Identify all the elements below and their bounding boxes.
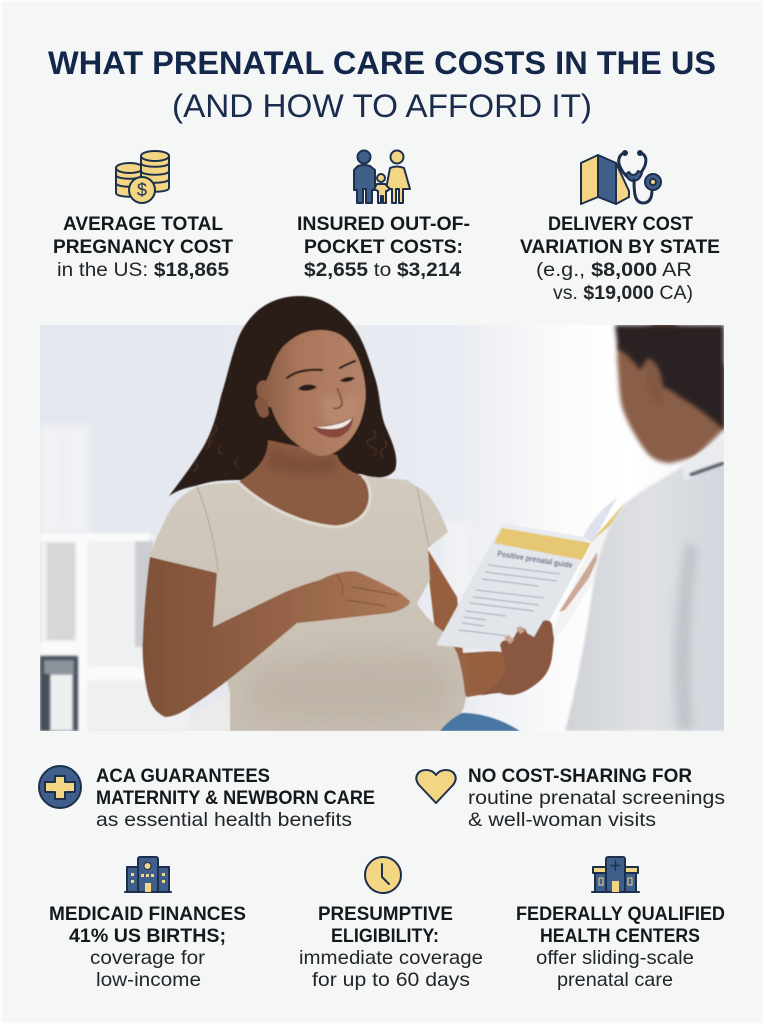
benefit: presumptive eligibility: PRESUMPTIVE [318, 903, 453, 925]
benefit: no cost-sharing: & well-woman visits [468, 809, 656, 831]
benefit: federally qualified health centers: HEALTH CENTERS [540, 925, 700, 947]
neck and chest [238, 440, 370, 527]
title: (AND HOW TO AFFORD IT) [172, 88, 592, 124]
benefit: no cost-sharing: NO COST-SHARING FOR [468, 765, 692, 787]
benefit: no cost-sharing: routine prenatal screenings [468, 787, 725, 809]
benefit: federally qualified health centers: prenatal care [557, 969, 673, 991]
hand holding booklet [480, 620, 554, 695]
hair [169, 296, 396, 496]
open booklet: Positive prenatal guide [436, 498, 626, 695]
belly shading [260, 659, 444, 709]
title: WHAT PRENATAL CARE COSTS IN THE US [48, 45, 716, 81]
benefit: Medicaid finances [49, 903, 246, 991]
doctor [565, 317, 726, 731]
coat collar [684, 440, 723, 479]
benefit: Medicaid finances: low-income [96, 969, 201, 991]
ear [255, 397, 269, 418]
benefit: federally qualified health centers: offer sliding-scale [536, 947, 694, 969]
stat: insured out-of-pocket costs: $2,655 to $3,214 [304, 259, 461, 281]
face [257, 330, 366, 456]
stat: delivery cost variation by state: (e.g., $8,000 AR [536, 259, 692, 281]
icon: hospital building [125, 857, 171, 892]
benefit: presumptive eligibility: for up to 60 days [312, 969, 470, 991]
doctor's skin: face and neck [617, 317, 726, 463]
benefit: Medicaid finances: MEDICAID FINANCES [49, 903, 246, 925]
benefit: ACA guarantees: ACA GUARANTEES [96, 765, 270, 787]
benefit: federally qualified health centers [516, 903, 725, 991]
icon: clock [365, 857, 401, 893]
photo background: clinic room [40, 325, 643, 731]
stat: delivery cost variation by state: vs. $19,000 CA) [553, 282, 693, 304]
arm resting on belly [143, 557, 410, 717]
benefit: ACA guarantees [96, 765, 375, 831]
icon: health center building [592, 857, 639, 892]
stat: insured out-of-pocket costs: INSURED OUT-OF- [297, 213, 470, 235]
stat: delivery cost variation by state: VARIATION BY STATE [520, 236, 720, 258]
right arm behind tee [425, 545, 523, 697]
jeans [440, 713, 520, 731]
benefit: federally qualified health centers: FEDERALLY QUALIFIED [516, 903, 725, 925]
benefit: no cost-sharing [468, 765, 725, 831]
eyes, brows, nose and smile [287, 361, 355, 378]
woman [143, 296, 523, 731]
photo: pregnant woman reading guide with doctor [40, 296, 726, 731]
stat: average total pregnancy cost: in the US: $18,865 [57, 259, 229, 281]
tee neckline [238, 476, 370, 527]
icon: family [354, 150, 410, 203]
benefit: presumptive eligibility: ELIGIBILITY: [331, 925, 439, 947]
icon: coins with dollar: $ [137, 180, 147, 200]
stat: insured out-of-pocket costs: POCKET COSTS: [304, 236, 463, 258]
tee shirt body [150, 476, 466, 731]
stat: average total pregnancy cost [53, 213, 233, 281]
fingers and knuckles [336, 574, 398, 606]
neck shadow [269, 450, 334, 474]
title [48, 45, 716, 124]
stat: delivery cost variation by state [520, 213, 720, 304]
icon: heart [416, 770, 456, 803]
open booklet: Positive prenatal guide: Positive prenatal guide [497, 549, 574, 570]
icon: medical cross in circle [39, 766, 81, 808]
doctor's hair [615, 325, 724, 430]
cheek highlight [322, 398, 351, 424]
sleeve seams [197, 487, 429, 571]
benefit: Medicaid finances: coverage for [90, 947, 206, 969]
benefit: presumptive eligibility: immediate coverage [299, 947, 483, 969]
benefit: ACA guarantees: as essential health benefits [96, 809, 352, 831]
stat: average total pregnancy cost: PREGNANCY COST [53, 236, 233, 258]
icon: map and stethoscope [581, 151, 661, 204]
benefit: ACA guarantees: MATERNITY & NEWBORN CARE [96, 787, 375, 809]
stat: insured out-of-pocket costs [297, 213, 470, 281]
benefit: presumptive eligibility [299, 903, 483, 991]
icon: coins with dollar [116, 151, 169, 203]
doctor's white coat [565, 466, 725, 731]
hair curls [192, 425, 386, 472]
stat: average total pregnancy cost: AVERAGE TOTAL [63, 213, 223, 235]
stat: delivery cost variation by state: DELIVERY COST [548, 213, 693, 235]
coat fold shadow [673, 540, 698, 730]
benefit: Medicaid finances: 41% US BIRTHS; [69, 925, 226, 947]
